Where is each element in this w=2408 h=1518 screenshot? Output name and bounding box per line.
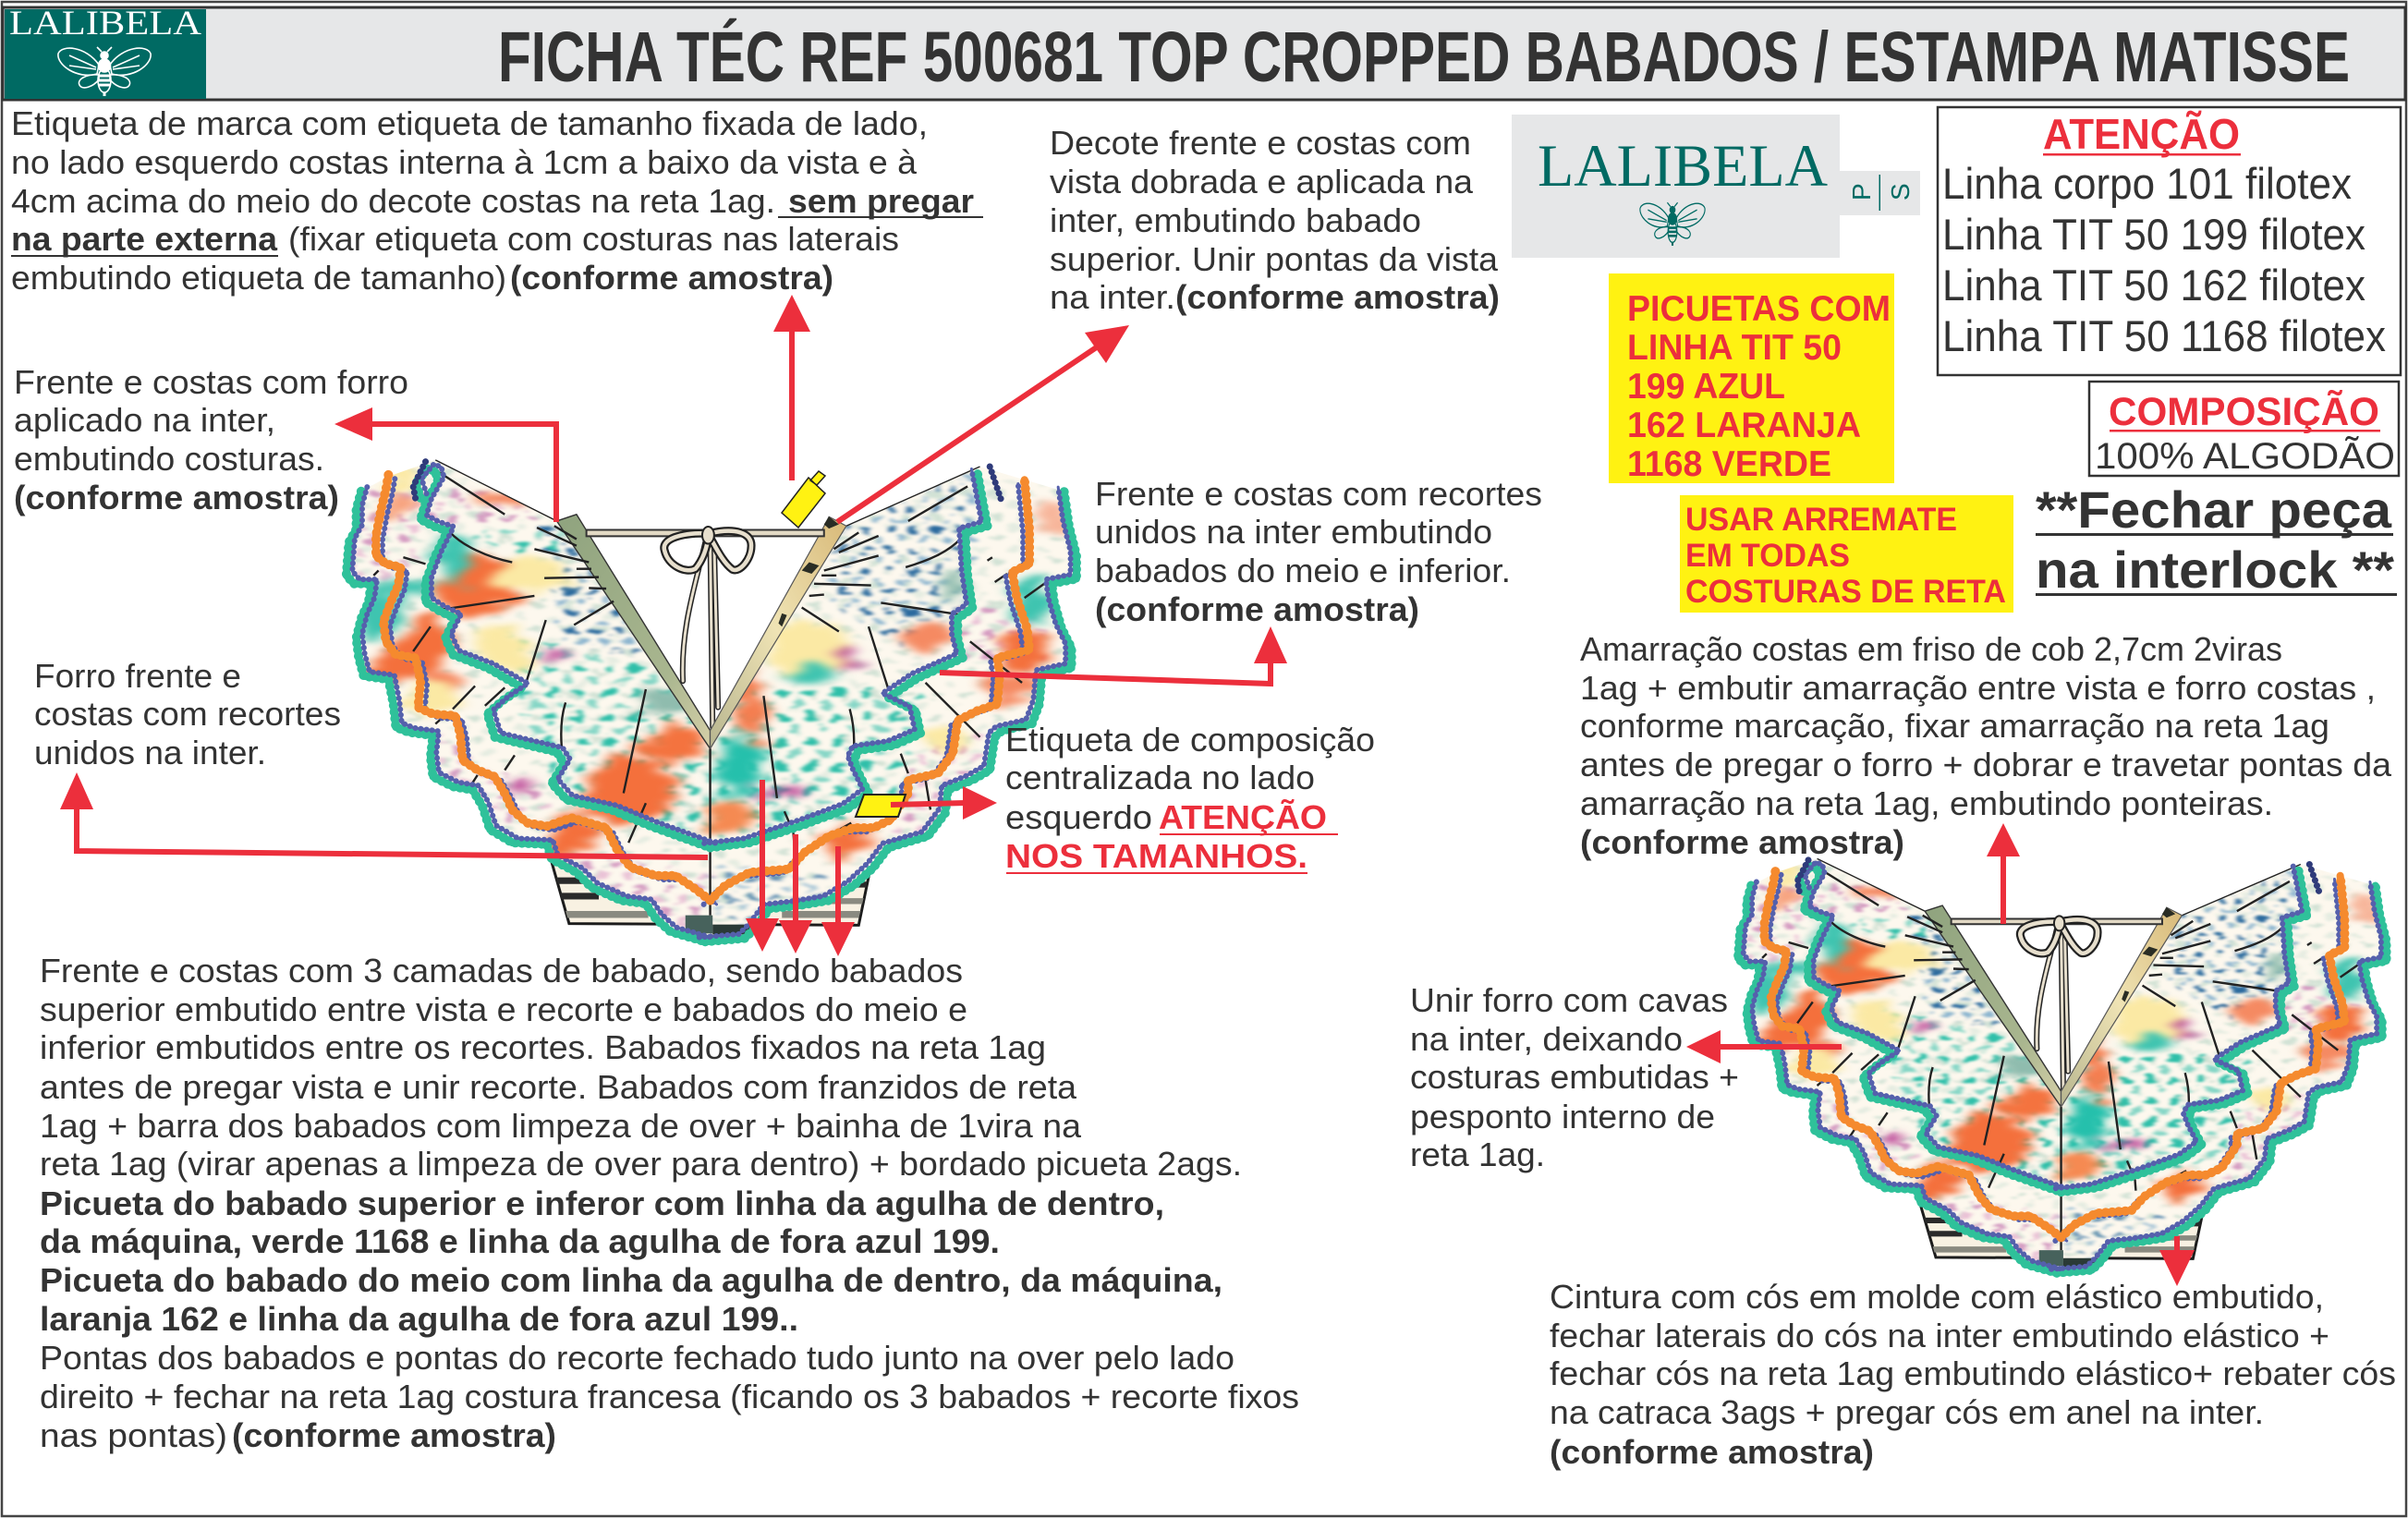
text block: back ties: antes de pregar o forro + dobrar e travetar pontas da <box>1580 746 2392 783</box>
arrow: to brand label text <box>773 295 810 480</box>
arrow: to back ties text <box>1987 823 2020 924</box>
callout: picot threads: 1168 VERDE <box>1627 444 1831 484</box>
arrow: to armhole text <box>1686 1030 1842 1063</box>
callout: composition: COMPOSIÇÃO <box>2109 390 2379 434</box>
garment: front illustration <box>314 443 1106 958</box>
note: interlock: na interlock ** <box>2036 540 2394 599</box>
text block: brand label: (conforme amostra) <box>510 259 833 297</box>
text block: ruffle instructions: (conforme amostra) <box>232 1416 556 1454</box>
text block: lining cut-outs: costas com recortes <box>34 695 341 733</box>
text block: ruffle instructions: reta 1ag (virar apenas a limpeza de over para dentro) + bordado picueta 2ags. <box>40 1145 1242 1183</box>
callout: attention thread list: Linha TIT 50 1168 filotex <box>1942 311 2386 360</box>
text block: brand label: sem pregar <box>788 182 974 220</box>
text block: composition label: NOS TAMANHOS. <box>1005 837 1307 875</box>
side yellow composition tag <box>856 795 906 817</box>
callout: picot threads: PICUETAS COM <box>1627 289 1891 329</box>
text block: back ties <box>1580 630 2392 861</box>
text block: composition label: esquerdo <box>1005 798 1152 836</box>
text block: armhole lining: pesponto interno de <box>1410 1098 1715 1135</box>
text block: brand label: 4cm acima do meio do decote costas na reta 1ag. <box>11 182 775 220</box>
text block: ruffle instructions: Pontas dos babados e pontas do recorte fechado tudo junto na over pelo lado <box>40 1339 1234 1377</box>
text block: cut-outs <box>1095 475 1542 628</box>
arrow: to cut-outs text <box>940 626 1287 684</box>
text block: composition label: centralizada no lado <box>1005 759 1315 796</box>
text block: ruffle instructions: superior embutido entre vista e recorte e babados do meio e <box>40 990 967 1028</box>
text block: neckline: Decote frente e costas com <box>1050 124 1471 162</box>
header logo <box>5 5 206 99</box>
text block: armhole lining: costuras embutidas + <box>1410 1058 1739 1096</box>
text block: ruffle instructions <box>40 952 1299 1454</box>
text block: back ties: amarração na reta 1ag, embutindo ponteiras. <box>1580 784 2273 822</box>
text block: brand label: Etiqueta de marca com etiqueta de tamanho fixada de lado, <box>11 104 928 142</box>
text block: waistband: fechar laterais do cós na inter embutindo elástico + <box>1550 1317 2329 1354</box>
text block: neckline: superior. Unir pontas da vista <box>1050 240 1499 278</box>
text block: ruffle instructions: Frente e costas com 3 camadas de babado, sendo babados <box>40 952 963 990</box>
text block: cut-outs: unidos na inter embutindo <box>1095 513 1492 551</box>
note: interlock: **Fechar peça <box>2036 480 2392 539</box>
arrow: to composition label text <box>891 786 997 820</box>
callout: picot threads: LINHA TIT 50 <box>1627 328 1842 368</box>
text block: armhole lining: na inter, deixando <box>1410 1020 1683 1058</box>
text block: brand label: no lado esquerdo costas interna à 1cm a baixo da vista e à <box>11 143 918 181</box>
text block: composition label <box>1005 721 1375 875</box>
callout: finishing: COSTURAS DE RETA <box>1685 574 2006 610</box>
arrow: to lining cut-outs text <box>60 772 708 857</box>
arrow: to waistband text <box>2159 1236 2195 1286</box>
arrow: to lining text <box>334 407 556 522</box>
brand logo panel <box>1512 115 1920 258</box>
text block: brand label: (fixar etiqueta com costuras nas laterais <box>288 220 899 258</box>
text block: back ties: (conforme amostra) <box>1580 823 1904 861</box>
callout: picot threads <box>1609 273 1894 484</box>
text block: waistband <box>1550 1278 2396 1471</box>
note: interlock <box>2036 480 2397 599</box>
callout: attention thread list: Linha TIT 50 199 filotex <box>1942 210 2365 259</box>
text block: back ties: 1ag + embutir amarração entre vista e forro costas , <box>1580 669 2376 707</box>
callout: finishing <box>1680 495 2013 613</box>
text block: neckline: inter, embutindo babado <box>1050 201 1421 239</box>
text block: lining: (conforme amostra) <box>14 479 339 516</box>
text block: composition label: Etiqueta de composição <box>1005 721 1375 759</box>
text block: ruffle instructions: direito + fechar na reta 1ag costura francesa (ficando os 3 babados + recorte fixos <box>40 1378 1299 1415</box>
text block: lining <box>14 363 408 516</box>
text block: lining cut-outs: Forro frente e <box>34 657 241 695</box>
text block: ruffle instructions: antes de pregar vista e unir recorte. Babados com franzidos de reta <box>40 1068 1077 1106</box>
text block: ruffle instructions: Picueta do babado do meio com linha da agulha de dentro, da máquina, <box>40 1261 1222 1299</box>
brand logo panel: P <box>1847 183 1876 200</box>
callout: finishing: EM TODAS <box>1685 538 1850 574</box>
callout: picot threads: 162 LARANJA <box>1627 406 1861 445</box>
text block: waistband: Cintura com cós em molde com elástico embutido, <box>1550 1278 2324 1316</box>
brand logo panel: LALIBELA <box>1538 133 1828 200</box>
text block: brand label: embutindo etiqueta de tamanho) <box>11 259 506 297</box>
callout: attention thread list: Linha corpo 101 filotex <box>1942 159 2352 208</box>
arrows: to ruffle text <box>746 780 855 956</box>
callout: picot threads: 199 AZUL <box>1627 367 1785 407</box>
text block: ruffle instructions: nas pontas) <box>40 1416 227 1454</box>
text block: waistband: na catraca 3ags + pregar cós em anel na inter. <box>1550 1393 2264 1431</box>
text block: lining cut-outs: unidos na inter. <box>34 734 266 771</box>
callout: attention thread list <box>1938 107 2401 375</box>
text block: cut-outs: (conforme amostra) <box>1095 590 1419 628</box>
text block: armhole lining: Unir forro com cavas <box>1410 981 1728 1019</box>
text block: ruffle instructions: laranja 162 e linha da agulha de fora azul 199.. <box>40 1300 798 1338</box>
text block: armhole lining: reta 1ag. <box>1410 1135 1545 1173</box>
garment: back illustration <box>1709 844 2408 1287</box>
callout: attention thread list: ATENÇÃO <box>2043 110 2240 158</box>
text block: back ties: Amarração costas em friso de cob 2,7cm 2viras <box>1580 630 2282 668</box>
text block: neckline: (conforme amostra) <box>1175 278 1500 316</box>
text block: cut-outs: babados do meio e inferior. <box>1095 552 1511 589</box>
text block: lining: embutindo costuras. <box>14 440 324 478</box>
text block: brand label: na parte externa <box>11 220 278 258</box>
text block: cut-outs: Frente e costas com recortes <box>1095 475 1542 513</box>
callout: composition: 100% ALGODÃO <box>2095 435 2395 477</box>
callout: finishing: USAR ARREMATE <box>1685 502 1957 538</box>
text block: neckline: na inter. <box>1050 278 1175 316</box>
text block: waistband: (conforme amostra) <box>1550 1433 1874 1471</box>
callout: composition <box>2089 382 2399 477</box>
text block: armhole lining <box>1410 981 1739 1173</box>
text block: ruffle instructions: da máquina, verde 1168 e linha da agulha de fora azul 199. <box>40 1222 1000 1260</box>
text block: waistband: fechar cós na reta 1ag embutindo elástico+ rebater cós <box>1550 1354 2396 1392</box>
text block: composition label: ATENÇÃO <box>1159 797 1327 836</box>
text block: lining cut-outs <box>34 657 341 771</box>
arrow: to neckline text <box>837 325 1129 522</box>
text block: ruffle instructions: 1ag + barra dos babados com limpeza de over + bainha de 1vira na <box>40 1107 1082 1145</box>
text block: ruffle instructions: inferior embutidos entre os recortes. Babados fixados na reta 1ag <box>40 1028 1046 1066</box>
text block: neckline <box>1050 124 1500 316</box>
callout: attention thread list: Linha TIT 50 162 filotex <box>1942 261 2365 310</box>
text block: neckline: vista dobrada e aplicada na <box>1050 163 1474 200</box>
text block: ruffle instructions: Picueta do babado superior e inferor com linha da agulha de dentro, <box>40 1184 1164 1222</box>
text block: back ties: conforme marcação, fixar amarração na reta 1ag <box>1580 707 2329 745</box>
brand logo panel: S <box>1886 183 1915 200</box>
text block: brand label <box>11 104 983 297</box>
top yellow label tag <box>782 471 825 528</box>
header band <box>3 5 2405 100</box>
header logo: LALIBELA <box>9 5 201 43</box>
text block: lining: aplicado na inter, <box>14 401 275 439</box>
text block: lining: Frente e costas com forro <box>14 363 408 401</box>
